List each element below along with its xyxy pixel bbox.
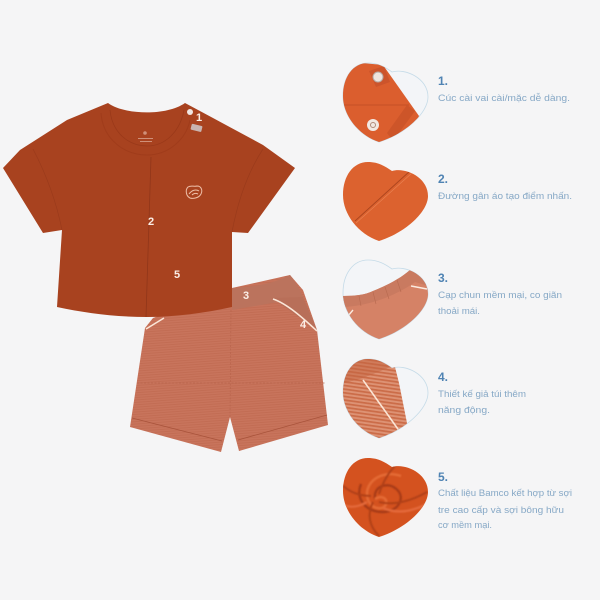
pocket piping left xyxy=(146,318,164,329)
marker 3: 3 xyxy=(243,290,249,302)
detail 1: shoulder buttons xyxy=(342,62,428,142)
shorts xyxy=(130,275,328,452)
shorts waistband xyxy=(232,275,303,310)
detail 2: centre seam xyxy=(343,162,428,241)
text 3: thoải mái. xyxy=(438,306,480,317)
hem left xyxy=(132,418,222,441)
text 4 xyxy=(438,370,526,416)
text 3 xyxy=(438,271,562,317)
text 2 xyxy=(438,172,572,202)
fabric photo xyxy=(341,357,407,441)
center seam xyxy=(146,157,151,317)
detail 5: fabric swirl xyxy=(343,458,428,537)
text 4: năng động. xyxy=(438,405,490,416)
text 4: 4. xyxy=(438,370,448,384)
shirt body xyxy=(3,103,295,317)
text 2: Đường gân áo tạo điểm nhấn. xyxy=(438,191,572,202)
collar inner line xyxy=(110,110,184,146)
hem right xyxy=(238,415,327,440)
detail 3: waistband xyxy=(342,260,428,340)
text 1: 1. xyxy=(438,74,448,88)
text 3: 3. xyxy=(438,271,448,285)
text 5: Chất liệu Bamco kết hợp từ sợi xyxy=(438,488,572,499)
text 5: cơ mềm mại. xyxy=(438,520,492,531)
text 4: Thiết kế giả túi thêm xyxy=(438,389,526,400)
text 1 xyxy=(438,74,570,104)
embroidered logo xyxy=(186,186,202,198)
pocket right xyxy=(272,297,317,330)
text 5: 5. xyxy=(438,470,448,484)
shorts seams xyxy=(137,310,325,417)
text 1: Cúc cài vai cài/mặc dễ dàng. xyxy=(438,93,570,104)
marker 5: 5 xyxy=(174,269,180,281)
heart outline xyxy=(343,359,428,438)
heart outline xyxy=(343,63,428,142)
text 3: Cạp chun mềm mại, co giãn xyxy=(438,290,562,301)
shorts body xyxy=(130,275,328,452)
text 2: 2. xyxy=(438,172,448,186)
t-shirt xyxy=(3,103,295,317)
shoulder button xyxy=(187,109,193,115)
marker 4: 4 xyxy=(300,319,307,331)
shoulder snap tab xyxy=(190,124,203,132)
fabric photo xyxy=(343,270,428,339)
text 5 xyxy=(438,470,572,531)
fabric photo xyxy=(343,162,428,241)
detail 4: false pocket xyxy=(341,357,428,441)
neck tag xyxy=(138,131,153,142)
marker 2: 2 xyxy=(148,216,154,228)
fabric photo xyxy=(343,458,428,537)
pocket piping right xyxy=(273,299,317,331)
marker 1: 1 xyxy=(196,112,202,124)
heart outline xyxy=(343,260,428,339)
text 5: tre cao cấp và sợi bông hữu xyxy=(438,505,564,516)
collar band xyxy=(101,113,190,155)
fabric photo xyxy=(343,63,419,142)
sleeve folds xyxy=(33,149,263,232)
